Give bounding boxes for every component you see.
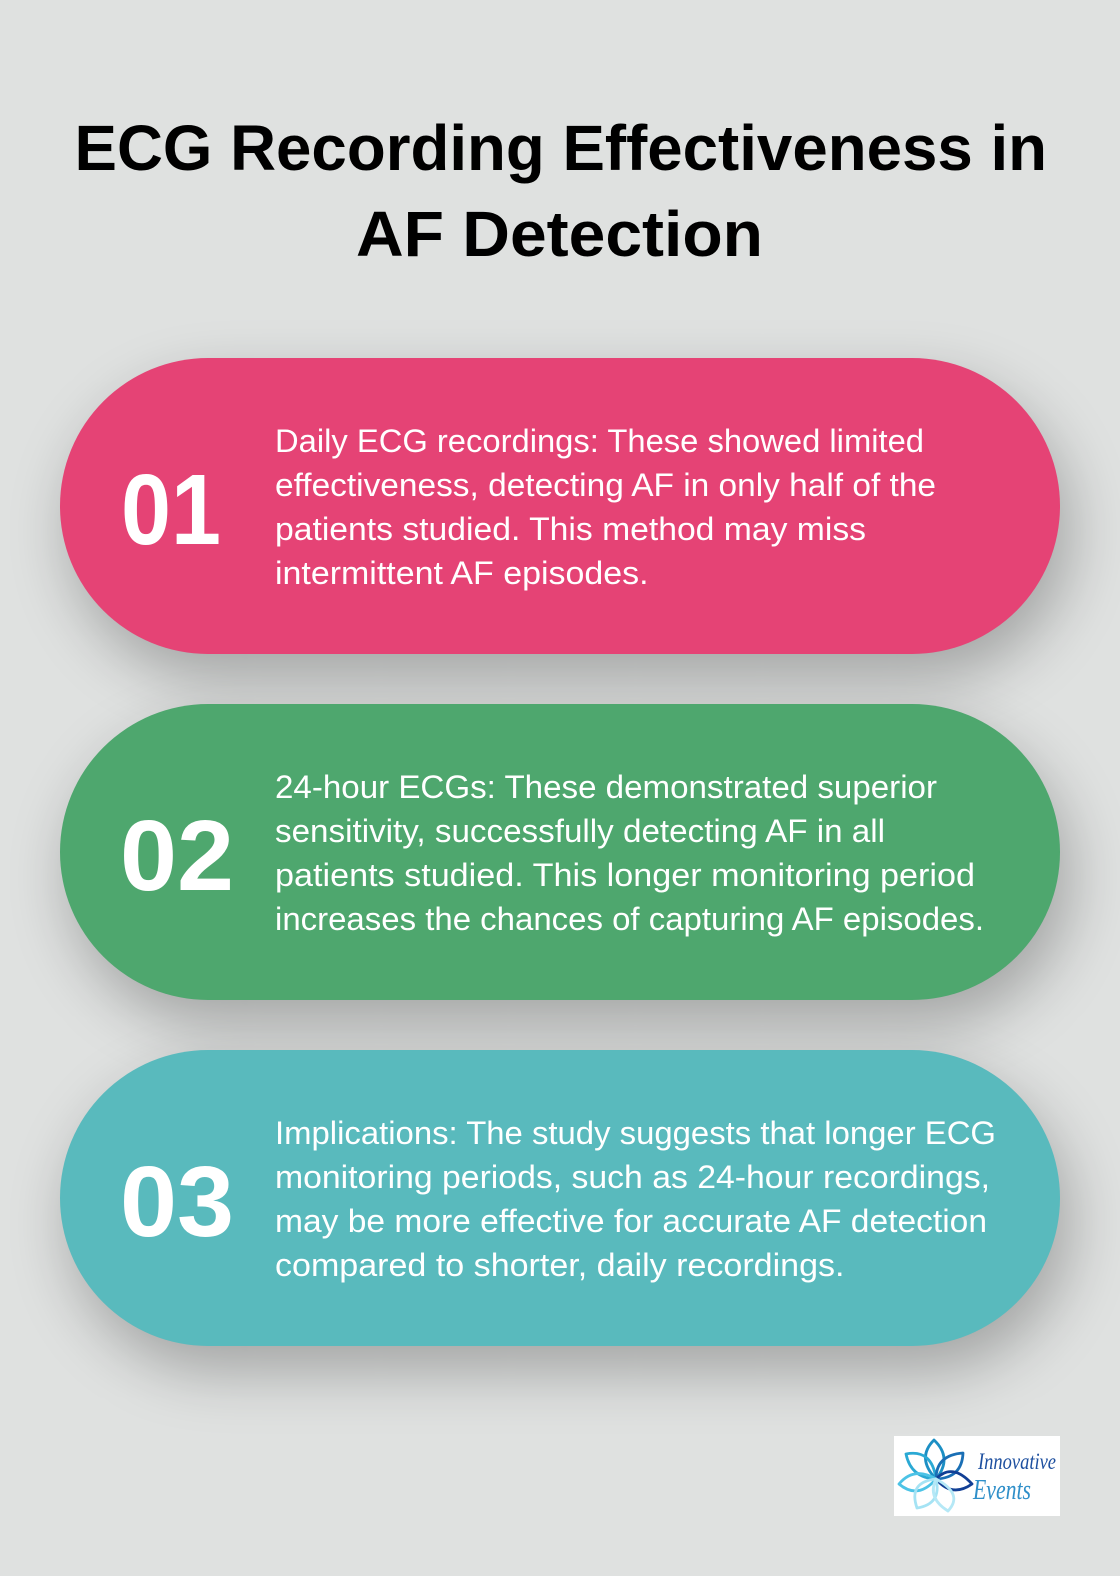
step number 03: 03 bbox=[120, 1146, 234, 1258]
text block: 24-hour ECGs: 24-hour ECGs: These demonstrated superior bbox=[275, 769, 937, 805]
text block: implications bbox=[275, 1115, 996, 1283]
icon: Innovative Events logo: Events bbox=[972, 1475, 1031, 1506]
text block: 24-hour ECGs: sensitivity, successfully detecting AF in all bbox=[275, 813, 885, 849]
step number 02: 02 bbox=[120, 800, 234, 912]
panel: step 02 24-hour ECGs bbox=[60, 704, 1060, 1000]
step number 01: 01 bbox=[121, 454, 221, 566]
text block: 24-hour ECGs: patients studied. This longer monitoring period bbox=[275, 857, 975, 893]
panel: step 03 implications bbox=[60, 1050, 1060, 1346]
text block: daily ECG recordings bbox=[275, 423, 936, 591]
text block: daily ECG recordings: effectiveness, detecting AF in only half of the bbox=[275, 467, 936, 503]
text block: implications: compared to shorter, daily recordings. bbox=[275, 1247, 844, 1283]
text block: implications: monitoring periods, such as 24-hour recordings, bbox=[275, 1159, 990, 1195]
text block: 24-hour ECGs bbox=[275, 769, 984, 937]
text block: daily ECG recordings: Daily ECG recordings: These showed limited bbox=[275, 423, 924, 459]
text block: implications: Implications: The study suggests that longer ECG bbox=[275, 1115, 996, 1151]
text block: implications: may be more effective for accurate AF detection bbox=[275, 1203, 987, 1239]
text block: daily ECG recordings: intermittent AF episodes. bbox=[275, 555, 648, 591]
text block: 24-hour ECGs: increases the chances of capturing AF episodes. bbox=[275, 901, 984, 937]
panel: step 01 daily ECG recordings bbox=[60, 358, 1060, 654]
icon: Innovative Events logo bbox=[894, 1436, 1060, 1516]
title: AF Detection bbox=[356, 198, 763, 270]
text block: daily ECG recordings: patients studied. This method may miss bbox=[275, 511, 866, 547]
title bbox=[74, 112, 1047, 270]
title: ECG Recording Effectiveness in bbox=[74, 112, 1047, 184]
